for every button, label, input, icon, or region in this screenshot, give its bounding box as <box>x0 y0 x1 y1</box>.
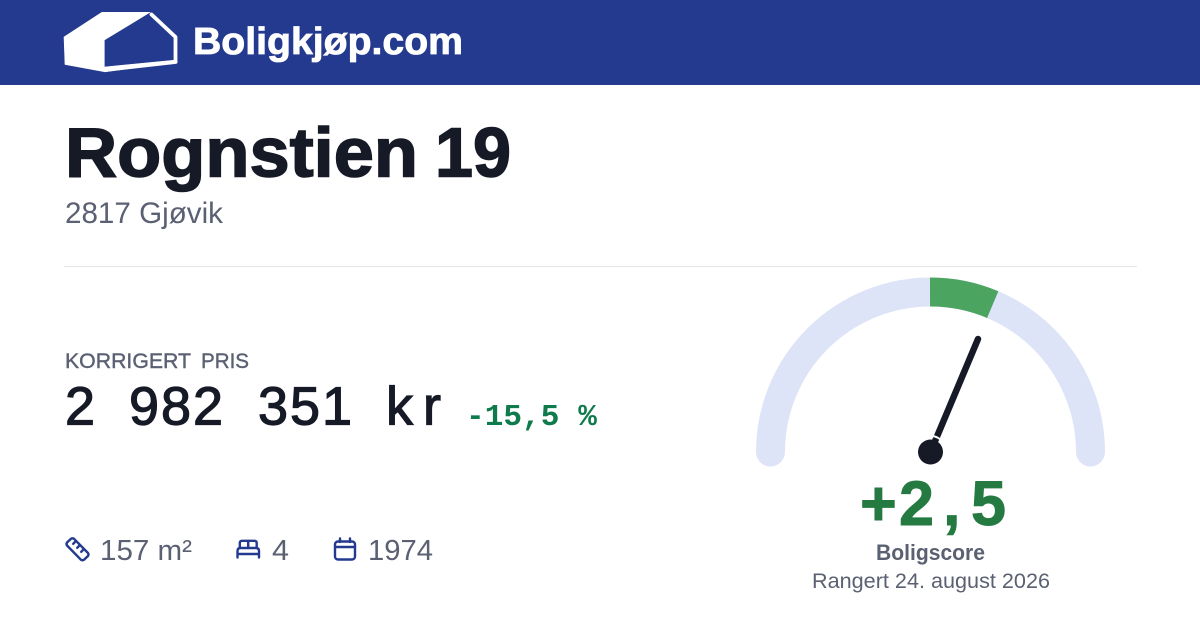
price change: -15,5 % <box>466 400 597 435</box>
gauge track <box>770 292 1090 452</box>
title: Rognstien <box>65 114 418 192</box>
panel: price <box>65 350 597 436</box>
score label: Boligscore <box>876 540 985 565</box>
header bar <box>0 0 1200 85</box>
logo wordmark: Boligkjøp.com <box>193 21 463 63</box>
panel: property facts <box>66 535 433 567</box>
gauge value arc <box>930 292 993 305</box>
panel: score gauge <box>770 292 1090 593</box>
icon: calendar <box>335 538 355 560</box>
price label: PRIS <box>201 350 249 373</box>
price value: 2 982 351 kr <box>65 376 441 436</box>
ranking date: Rangert 24. august 2026 <box>812 570 1050 593</box>
title: 19 <box>435 114 511 192</box>
area: 157 m² <box>100 535 192 567</box>
address: 2817 Gjøvik <box>65 197 224 230</box>
gauge needle <box>918 339 978 464</box>
price label <box>65 350 249 373</box>
year built: 1974 <box>368 535 433 567</box>
score value: +2,5 <box>860 469 1006 539</box>
icon: house logo <box>64 12 178 72</box>
icon: ruler <box>66 538 88 560</box>
bedrooms: 4 <box>272 535 289 567</box>
price label: KORRIGERT <box>65 350 191 373</box>
icon: bed <box>238 541 259 558</box>
